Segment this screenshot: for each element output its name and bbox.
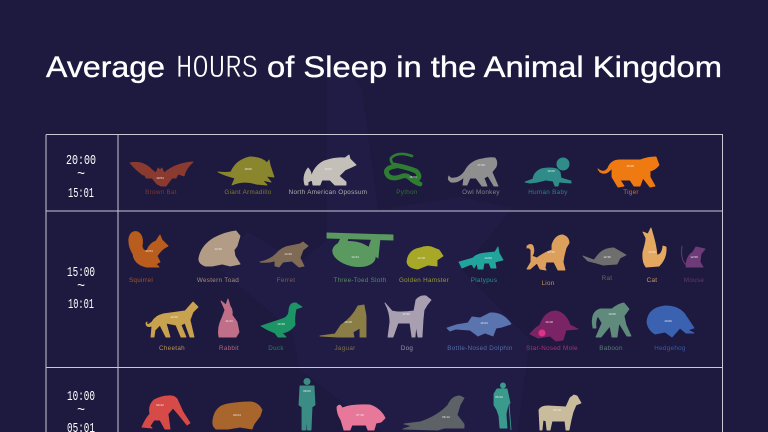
animal: Giant Armadillo	[218, 157, 274, 196]
animal: North American Opossum: North American Opossum	[289, 189, 367, 196]
animal: Human Baby: 16:00	[547, 169, 555, 173]
animal: Owl Monkey: 17:00	[477, 163, 485, 167]
animal: Bottle-Nosed Dolphin	[447, 313, 513, 352]
animal: Rabbit	[218, 299, 239, 352]
animal: Guinea Pig	[213, 402, 262, 429]
title: Average	[46, 51, 165, 84]
animal: Three-Toed Sloth	[327, 233, 393, 284]
time range: 10:00 to 05:01	[67, 390, 95, 432]
animal: Dog	[385, 296, 431, 352]
animal: Platypus	[459, 247, 503, 284]
animal: Hedgehog: 10:06	[664, 319, 672, 323]
animal: Golden Hamster: 14:18	[417, 256, 425, 260]
animal: North American Opossum: 18:00	[324, 167, 332, 171]
animal: Duck: Duck	[268, 345, 284, 352]
time range: 10:00 to 05:01: 10:00	[67, 390, 95, 405]
animal: Cat	[643, 228, 666, 284]
animal: Lion: 13:30	[547, 250, 555, 254]
animal: Baboon: Baboon	[599, 345, 623, 352]
animal: Cheetah: Cheetah	[159, 345, 185, 352]
animal: Cheetah	[146, 302, 198, 352]
animal: Chimpanzee: 09:42	[156, 403, 164, 407]
time range: 20:00 to 15:01: 15:01	[68, 187, 94, 202]
animal: Ferret	[260, 242, 308, 284]
animal: Ferret: Ferret	[277, 277, 295, 284]
animal: Rat: 12:36	[603, 255, 611, 259]
animal: Mouse: Mouse	[684, 277, 704, 284]
animal: Python: Python	[396, 189, 418, 196]
animal: Three-Toed Sloth: 14:24	[351, 255, 359, 259]
animal: Human Adult	[299, 378, 315, 430]
animal: Pig	[337, 405, 385, 430]
table grid	[46, 134, 722, 432]
animal: Brown Bat: 19:54	[156, 176, 164, 180]
animal: Owl Monkey: Owl Monkey	[462, 189, 500, 196]
animal: Guinea Pig: 09:24	[233, 413, 241, 417]
animal: Ferret: 14:30	[284, 252, 292, 256]
animal: Squirrel: Squirrel	[129, 277, 153, 284]
animal: Rabbit: 11:24	[225, 319, 233, 323]
animal: Three-Toed Sloth: Three-Toed Sloth	[333, 277, 387, 284]
time range: 20:00 to 15:01: 20:00	[66, 154, 96, 169]
animal: Brown Bat	[130, 162, 193, 196]
title	[46, 50, 722, 87]
animal: Python	[386, 154, 420, 196]
time range: 15:00 to 10:01	[67, 266, 95, 313]
animal: Star-Nosed Mole: 10:18	[545, 320, 553, 324]
animal: North American Opossum	[289, 155, 367, 196]
animal: Bottle-Nosed Dolphin: 10:24	[480, 321, 488, 325]
animal: Cat: Cat	[647, 277, 657, 284]
animal: Grey Seal: 06:12	[442, 415, 450, 419]
animal: Golden Hamster	[399, 246, 449, 284]
animal: Chimpanzee	[142, 396, 190, 429]
animal: Human Baby	[525, 158, 571, 196]
animal: Cat: 12:06	[648, 250, 656, 254]
time range: 15:00 to 10:01: 10:01	[68, 298, 94, 313]
animal: Cheetah: 12:06	[170, 315, 178, 319]
animal: Giant Armadillo: 18:06	[244, 167, 252, 171]
title: of Sleep in the Animal Kingdom	[267, 51, 722, 84]
animal: Goat	[539, 395, 581, 430]
animal: Hedgehog: Hedgehog	[654, 345, 686, 352]
animal: Dog: Dog	[401, 345, 413, 352]
time range: 15:00 to 10:01: ~	[77, 280, 85, 295]
animal: Squirrel: 14:54	[145, 249, 153, 253]
animal: Lion: Lion	[541, 280, 555, 287]
animal: Dog: 10:36	[402, 312, 410, 316]
animal: Tiger: Tiger	[623, 189, 639, 196]
animal: Baboon	[592, 303, 631, 352]
animal: Lion	[527, 235, 569, 287]
animal: Platypus: 14:00	[484, 256, 492, 260]
animal: Human Baby: Human Baby	[528, 189, 568, 196]
animal: Elderly Human	[494, 382, 511, 430]
animal: Human Adult: 08:00	[303, 389, 311, 393]
animal: Mouse	[682, 246, 705, 284]
time range: 15:00 to 10:01: 15:00	[67, 266, 95, 281]
animal: Baboon: 10:06	[608, 312, 616, 316]
animal: Rabbit: Rabbit	[219, 345, 239, 352]
animal: Western Toad: 14:30	[214, 247, 222, 251]
animal: Platypus: Platypus	[471, 277, 497, 284]
animal: Star-Nosed Mole: Star-Nosed Mole	[526, 345, 578, 352]
animal: Star-Nosed Mole	[526, 311, 578, 352]
animal: Grey Seal	[403, 396, 464, 430]
animal: Rat	[583, 248, 626, 282]
animal: Hedgehog	[647, 306, 694, 352]
animal: Jaguar: Jaguar	[334, 345, 356, 352]
animal: Jaguar: 10:48	[344, 320, 352, 324]
title: HOURS	[176, 50, 258, 87]
animal: Rat: Rat	[602, 275, 612, 282]
animal: Tiger: 15:48	[626, 164, 634, 168]
animal: Squirrel	[129, 232, 168, 284]
animal: Golden Hamster: Golden Hamster	[399, 277, 449, 284]
animal: Goat: 05:18	[553, 408, 561, 412]
animal: Bottle-Nosed Dolphin: Bottle-Nosed Dolphin	[447, 345, 513, 352]
time range: 20:00 to 15:01: ~	[77, 168, 85, 183]
animal: Western Toad: Western Toad	[197, 277, 239, 284]
animal: Pig: 07:48	[356, 413, 364, 417]
animal: Giant Armadillo: Giant Armadillo	[224, 189, 272, 196]
animal: Duck	[261, 303, 302, 352]
animal: Mouse: 12:06	[690, 255, 698, 259]
time range: 20:00 to 15:01	[66, 154, 96, 202]
animal: Elderly Human: 05:30	[495, 395, 503, 399]
animal: Tiger	[598, 157, 659, 196]
animal: Python: 18:00	[409, 175, 417, 179]
animal: Jaguar	[320, 305, 366, 352]
animal: Owl Monkey	[448, 158, 500, 196]
time range: 10:00 to 05:01: ~	[77, 404, 85, 419]
animal: Western Toad	[197, 231, 240, 284]
animal: Brown Bat: Brown Bat	[145, 189, 177, 196]
animal: Duck: 10:48	[277, 322, 285, 326]
